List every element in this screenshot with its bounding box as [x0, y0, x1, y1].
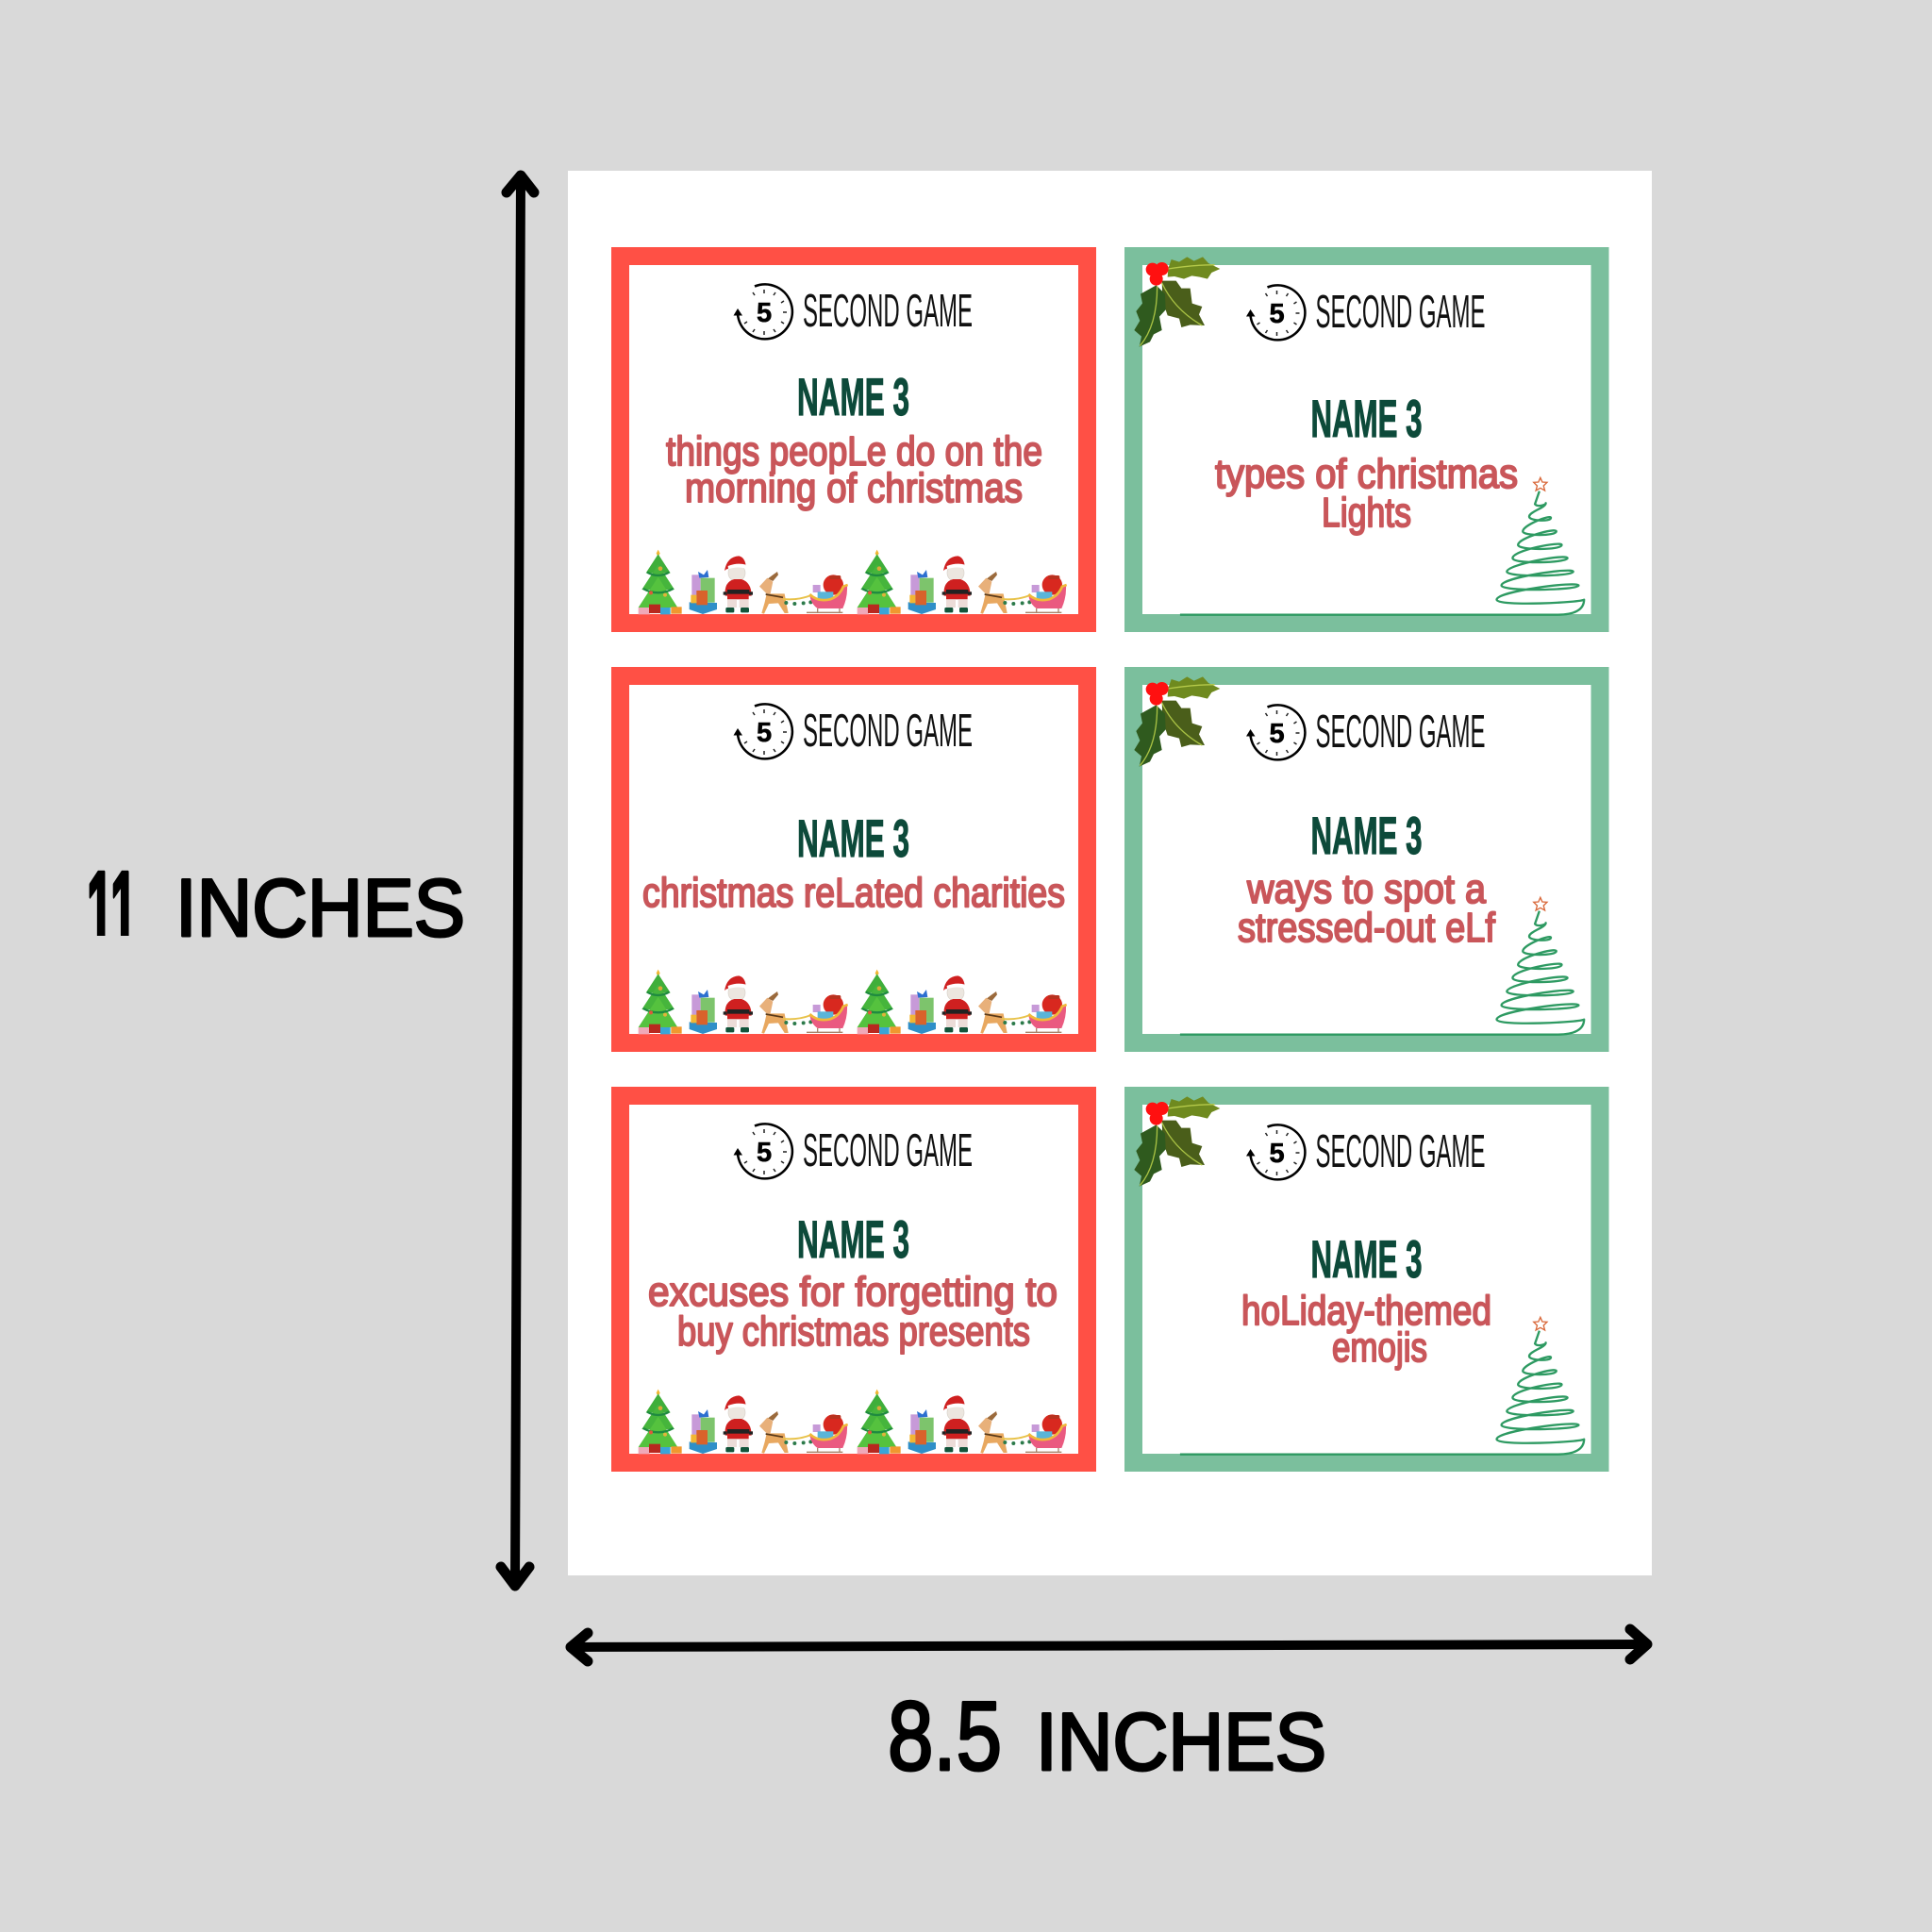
arrow: vertical 11 inch dimension: [501, 175, 534, 1586]
prompt text: buy christmas presents: [677, 1308, 1030, 1355]
heading: NAME 3: [1311, 389, 1423, 448]
label: 8.5 inches: 8.5: [888, 1682, 1002, 1791]
icon: spiral tree: [1180, 897, 1584, 1035]
icon: five second clock: [734, 1124, 792, 1178]
icon: holly: [1134, 676, 1220, 767]
heading: NAME 3: [797, 808, 909, 868]
card: excuses for forgetting to buy christmas presents: [621, 1096, 1087, 1462]
heading: NAME 3: [1311, 806, 1423, 865]
prompt text: ways to spot a: [1246, 866, 1486, 912]
card: ways to spot a stressed-out elf: SECOND GAME: [1315, 707, 1485, 758]
icon: five second clock: 5: [757, 298, 772, 328]
prompt text: excuses for forgetting to: [648, 1269, 1058, 1315]
prompt text: christmas reLated charities: [642, 870, 1065, 916]
card: types of christmas lights: SECOND GAME: [1315, 287, 1485, 338]
card: things people do on the morning of christmas: [621, 257, 1087, 623]
arrow: horizontal 8.5 inch dimension: [571, 1629, 1647, 1661]
prompt text: emojis: [1332, 1324, 1427, 1371]
card: holiday-themed emojis: [1134, 1096, 1600, 1462]
icon: five second clock: 5: [1269, 1139, 1285, 1169]
icon: five second clock: 5: [757, 1138, 772, 1168]
card frame: [621, 675, 1087, 1043]
icon: five second clock: [1246, 285, 1305, 340]
label: 8.5 inches: INCHES: [1036, 1697, 1326, 1788]
decoration: christmas strip: [639, 550, 1067, 614]
card frame: [1134, 675, 1600, 1043]
card: excuses for forgetting to buy christmas presents: SECOND GAME: [803, 1125, 973, 1176]
label: 11 inches: [89, 870, 463, 938]
prompt text: hoLiday-themed: [1241, 1288, 1491, 1334]
card: ways to spot a stressed-out elf: [1134, 675, 1600, 1043]
label: 8.5 inches: [888, 1682, 1326, 1791]
icon: holly: [1134, 1096, 1220, 1187]
card frame: [1134, 1096, 1600, 1462]
prompt text: [648, 1269, 1058, 1355]
icon: five second clock: 5: [1269, 299, 1285, 329]
card: christmas related charities: SECOND GAME: [803, 706, 973, 757]
label: 11 inches: INCHES: [175, 863, 465, 954]
prompt text: [666, 428, 1042, 511]
decoration: christmas strip: [639, 970, 1067, 1034]
icon: holly: [1134, 257, 1220, 347]
heading: NAME 3: [797, 1209, 909, 1269]
decoration: christmas strip: [639, 1390, 1067, 1454]
icon: spiral tree: [1180, 1317, 1584, 1455]
card: holiday-themed emojis: SECOND GAME: [1315, 1126, 1485, 1177]
icon: five second clock: 5: [757, 718, 772, 748]
prompt text: [1238, 866, 1496, 951]
prompt text: Lights: [1322, 490, 1411, 536]
heading: NAME 3: [1311, 1229, 1423, 1289]
white letter page: [568, 171, 1652, 1575]
card: types of christmas lights: [1134, 257, 1600, 623]
heading: NAME 3: [797, 367, 909, 426]
card frame: [1134, 257, 1600, 623]
card frame: [621, 1096, 1087, 1462]
icon: five second clock: 5: [1269, 719, 1285, 749]
icon: five second clock: [1246, 705, 1305, 759]
icon: five second clock: [1246, 1124, 1305, 1179]
card frame: [621, 257, 1087, 623]
card: things people do on the morning of christmas: SECOND GAME: [803, 286, 973, 337]
icon: spiral tree: [1180, 477, 1584, 615]
icon: five second clock: [734, 284, 792, 339]
prompt text: [1241, 1288, 1491, 1371]
prompt text: types of christmas: [1215, 451, 1518, 497]
icon: five second clock: [734, 704, 792, 758]
card: christmas related charities: [621, 675, 1087, 1043]
prompt text: things peopLe do on the: [666, 428, 1042, 475]
prompt text: [1215, 451, 1518, 536]
prompt text: stressed-out eLf: [1238, 905, 1496, 951]
prompt text: morning of christmas: [685, 465, 1023, 511]
label: 11 inches: 11: [87, 849, 137, 974]
